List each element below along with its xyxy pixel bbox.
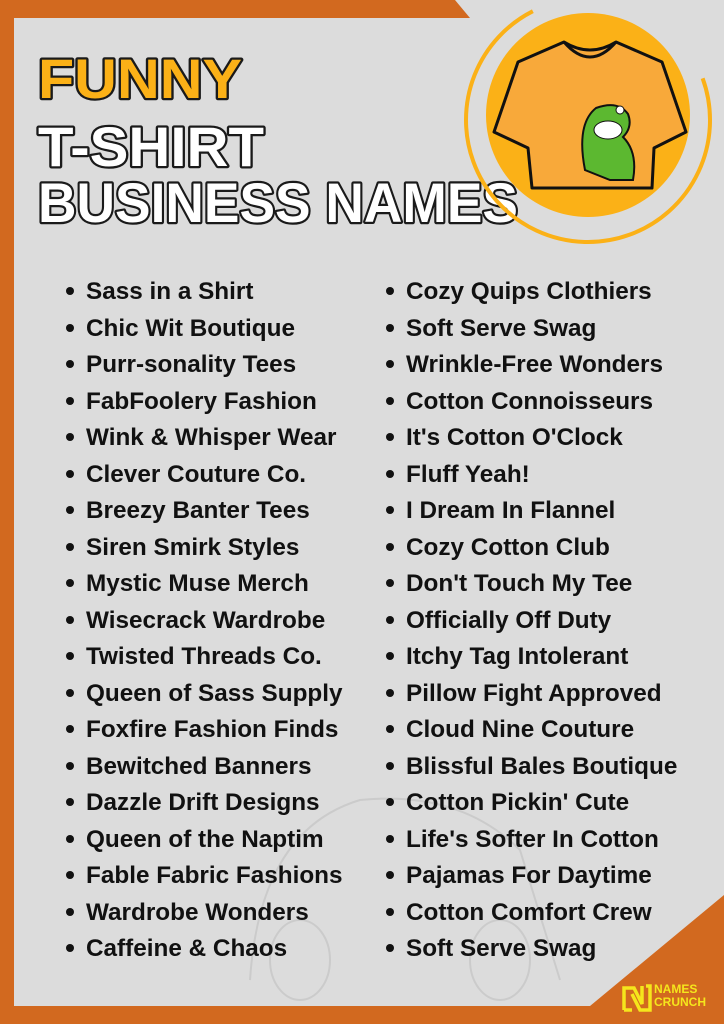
logo: names crunch: CRUNCH xyxy=(654,995,706,1009)
title: T-SHIRT xyxy=(38,115,264,178)
list: right column: Life's Softer In Cotton xyxy=(406,826,659,852)
list: left column: Mystic Muse Merch xyxy=(86,570,309,597)
list: left column: Queen of Sass Supply xyxy=(86,680,343,706)
list: left column: Sass in a Shirt xyxy=(86,278,253,305)
list: left column: Wisecrack Wardrobe xyxy=(86,606,325,634)
list: right column: Officially Off Duty xyxy=(406,606,611,634)
list: right column: Soft Serve Swag xyxy=(406,314,596,342)
list: right column: It's Cotton O'Clock xyxy=(406,424,623,451)
list: left column: Wink & Whisper Wear xyxy=(86,424,336,451)
list: left column: Queen of the Naptim xyxy=(86,826,324,852)
list: right column: Pillow Fight Approved xyxy=(406,680,662,706)
title xyxy=(36,47,518,230)
watermark car xyxy=(250,799,560,1000)
list: left column: Bewitched Banners xyxy=(86,752,311,780)
list: left column xyxy=(66,278,343,962)
list: right column xyxy=(386,278,677,962)
list: right column: Soft Serve Swag xyxy=(406,935,596,962)
list: right column: Cotton Connoisseurs xyxy=(406,388,653,414)
list: left column: Clever Couture Co. xyxy=(86,460,306,488)
list: right column: Itchy Tag Intolerant xyxy=(406,643,628,670)
list: right column: Don't Touch My Tee xyxy=(406,570,632,597)
list: right column: Pajamas For Daytime xyxy=(406,862,652,889)
list: right column: Wrinkle-Free Wonders xyxy=(406,351,663,378)
list: left column: Siren Smirk Styles xyxy=(86,534,299,560)
list: left column: Foxfire Fashion Finds xyxy=(86,716,338,743)
list: left column: Fable Fabric Fashions xyxy=(86,862,343,889)
list: right column: Cotton Pickin' Cute xyxy=(406,789,629,816)
logo: names crunch: NAMES xyxy=(654,982,697,996)
list: left column: Chic Wit Boutique xyxy=(86,314,295,342)
list: left column: Purr-sonality Tees xyxy=(86,351,296,378)
list: right column: Cloud Nine Couture xyxy=(406,716,634,743)
list: left column: Wardrobe Wonders xyxy=(86,898,309,926)
list: left column: Dazzle Drift Designs xyxy=(86,789,320,816)
icon: t-shirt with dinosaur xyxy=(464,9,712,244)
list: right column: Blissful Bales Boutique xyxy=(406,752,677,780)
list: left column: FabFoolery Fashion xyxy=(86,388,317,414)
list: left column: Breezy Banter Tees xyxy=(86,497,310,524)
list: right column: Cotton Comfort Crew xyxy=(406,898,652,926)
list: right column: I Dream In Flannel xyxy=(406,497,615,524)
list: right column: Cozy Cotton Club xyxy=(406,534,610,560)
list: right column: Fluff Yeah! xyxy=(406,460,530,488)
list: right column: Cozy Quips Clothiers xyxy=(406,278,652,305)
list: left column: Caffeine & Chaos xyxy=(86,935,287,962)
title: FUNNY xyxy=(38,47,242,110)
list: left column: Twisted Threads Co. xyxy=(86,643,322,670)
logo: names crunch xyxy=(622,982,706,1012)
